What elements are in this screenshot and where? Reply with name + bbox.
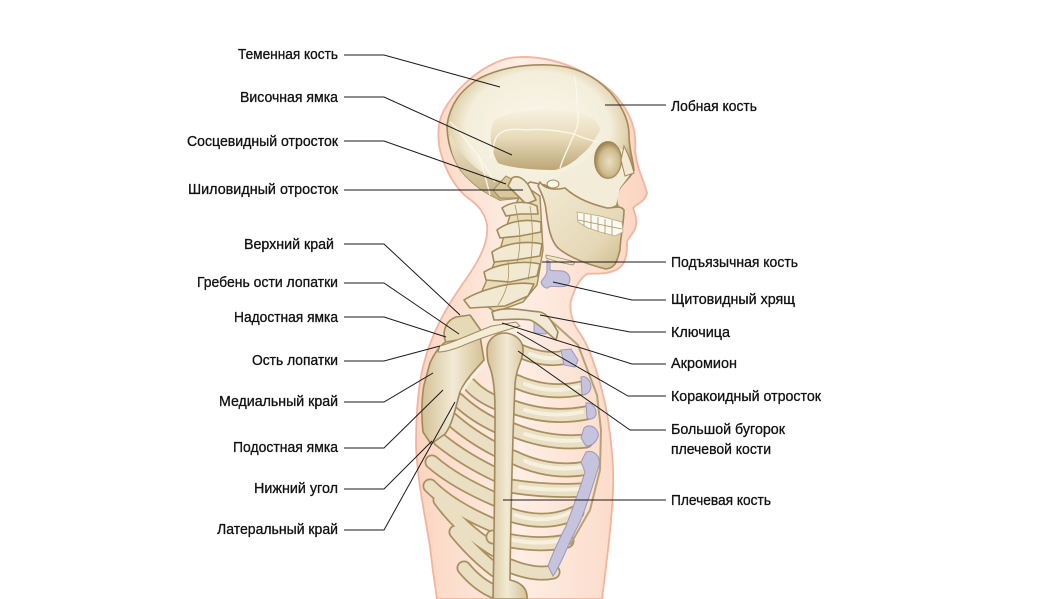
labels: right: Коракоидный отросток [671,389,822,405]
body silhouette [416,57,647,599]
labels: right [671,99,822,509]
orbit [594,142,622,178]
labels: right: плечевой кости [671,442,771,458]
humerus [487,333,527,599]
nasal bone [621,146,634,176]
labels: left: Височная ямка [240,90,339,106]
labels: right: Большой бугорок [671,422,786,438]
labels: left: Медиальный край [219,394,338,410]
labels: left [187,47,339,538]
labels: left: Латеральный край [217,522,338,538]
labels: left: Сосцевидный отросток [187,134,339,150]
labels: right: Лобная кость [671,99,757,115]
cervical spine [464,177,543,312]
cranium [447,65,634,215]
mastoid [493,176,524,198]
sternum edge [548,318,601,545]
coronal and squamous sutures [490,76,598,168]
labels: right: Ключица [671,325,731,341]
scapula [422,315,520,444]
right rib portions [493,351,587,573]
skull [447,65,634,269]
labels: right: Акромион [671,356,737,372]
labels: left: Верхний край [244,237,334,253]
labels: right: Подъязычная кость [671,255,798,271]
larynx [541,255,575,288]
spinous process 1 [508,177,536,204]
labels: left: Шиловидный отросток [188,182,339,198]
rib cage [430,318,601,592]
zygomatic process [547,180,559,188]
clavicle [492,309,558,340]
hyoid bone [546,255,575,265]
labels: left: Надостная ямка [234,310,339,326]
labels: right: Плечевая кость [671,493,771,509]
mandible [538,182,624,269]
labels: left: Подостная ямка [233,440,339,456]
labels: left: Ость лопатки [252,353,338,369]
teeth [577,212,623,236]
labels: left: Теменная кость [238,47,338,63]
left rib portions [430,385,497,592]
labels: left: Нижний угол [254,481,338,497]
labels: right: Щитовидный хрящ [671,292,795,308]
temporal fossa [491,110,600,170]
face plate [560,145,632,212]
costal cartilage [534,320,599,576]
labels: left: Гребень ости лопатки [197,275,338,291]
leader lines [344,55,666,530]
thyroid cartilage [541,260,570,288]
occipital shading [450,135,520,200]
